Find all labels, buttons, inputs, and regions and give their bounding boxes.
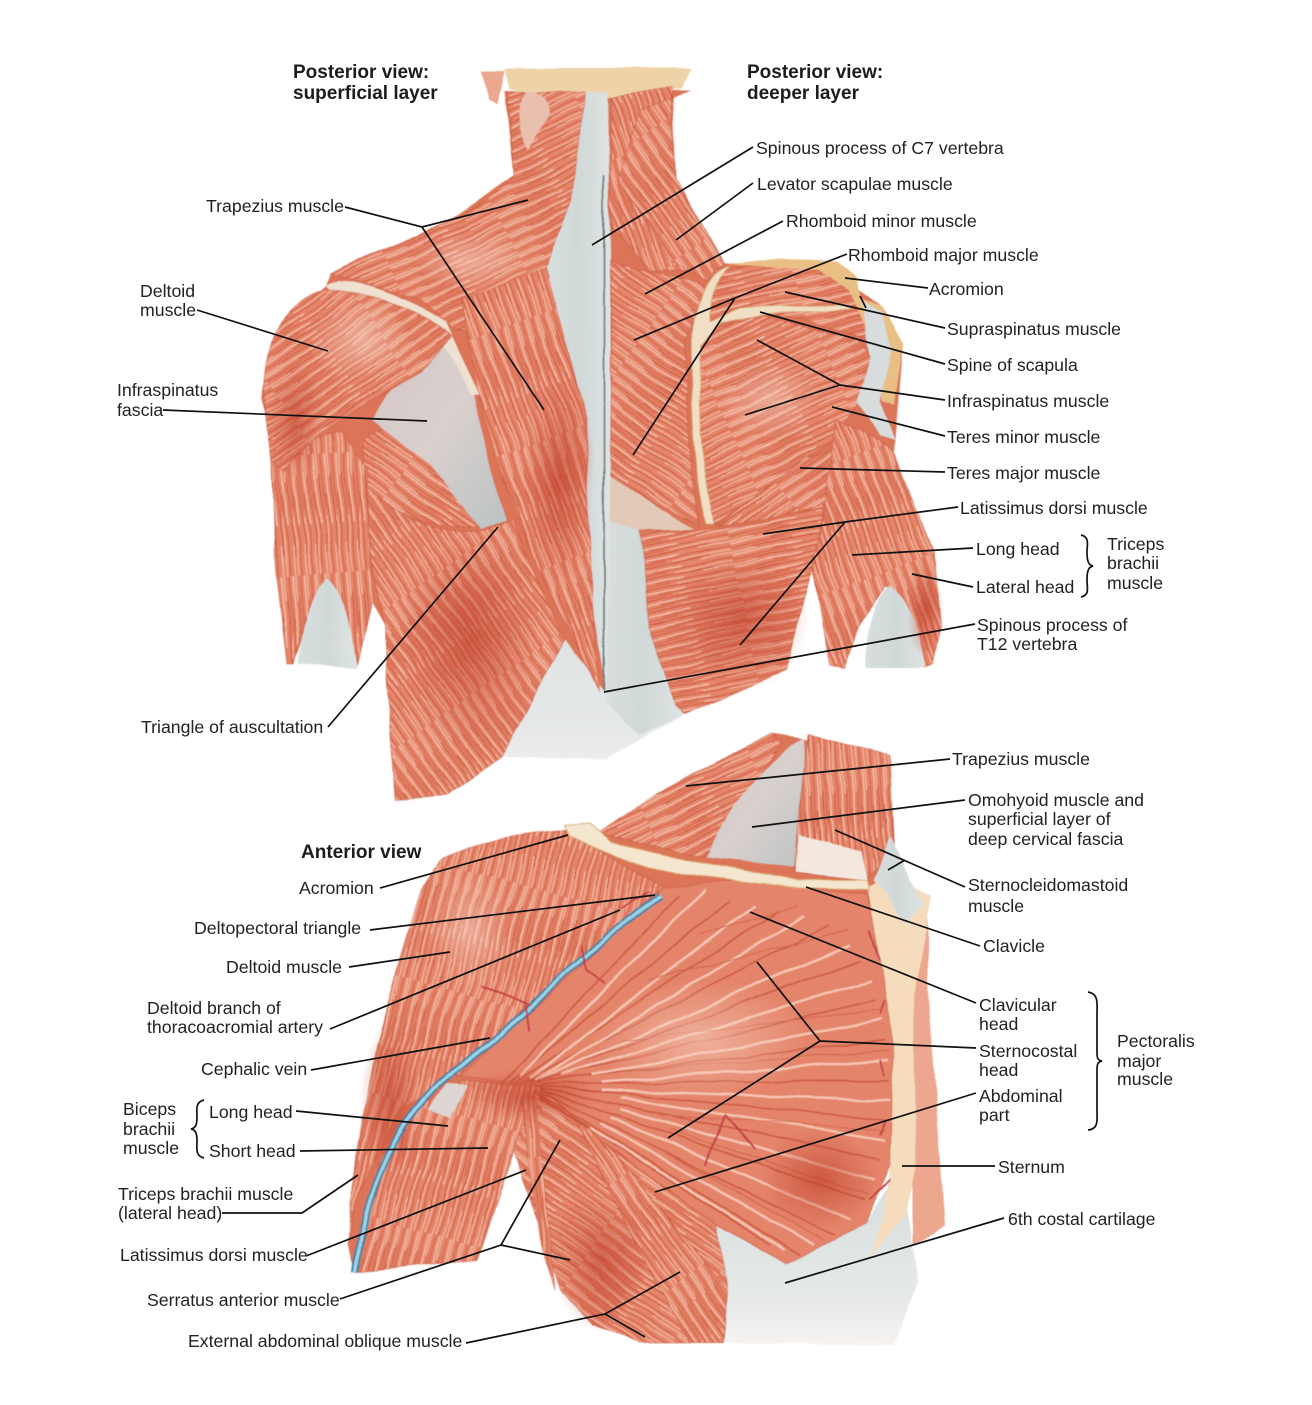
sternum band	[866, 875, 932, 1258]
label: lateral head: Lateral head	[976, 577, 1074, 597]
sternocleidomastoid tendon	[797, 835, 866, 880]
label: rhomboid major: Rhomboid major muscle	[848, 245, 1039, 265]
label: triceps brachii: Triceps	[1107, 534, 1164, 554]
oblique band	[570, 1110, 727, 1343]
label: cephalic vein: Cephalic vein	[201, 1059, 307, 1079]
label: clavicular head: Clavicular	[979, 995, 1057, 1015]
label: sternocleidomastoid: muscle	[968, 896, 1024, 916]
lower left trapezius	[462, 268, 599, 692]
biceps brachii	[356, 1082, 538, 1272]
posterior silhouette underlay	[262, 92, 941, 800]
label: supraspinatus: Supraspinatus muscle	[947, 319, 1121, 339]
label: deltoid: Deltoid	[140, 281, 195, 301]
label: infraspinatus: Infraspinatus muscle	[947, 391, 1109, 411]
sternocleidomastoid	[795, 734, 894, 880]
label: clavicular head: head	[979, 1014, 1018, 1034]
left spine of scapula	[325, 282, 480, 395]
right elbow tendon	[866, 585, 926, 668]
label: teres major: Teres major muscle	[947, 463, 1100, 483]
label: levator scapulae: Levator scapulae muscle	[757, 174, 953, 194]
label: latissimus dorsi anterior: Latissimus dorsi muscle	[120, 1245, 308, 1265]
right lumbar fascia side	[606, 522, 682, 735]
neck top band	[505, 68, 691, 98]
leader lines: posterior view	[163, 147, 975, 727]
lumbar fascia	[395, 525, 682, 802]
right levator scapulae	[620, 100, 724, 282]
shading on anterior muscles	[360, 870, 880, 1330]
label: infraspinatus fascia: fascia	[117, 400, 163, 420]
infraspinatus fascia	[372, 335, 505, 530]
abdominal fascia	[716, 1165, 917, 1345]
left elbow tendon	[298, 579, 358, 668]
label: sternocostal head: head	[979, 1060, 1018, 1080]
label: deltoid: muscle	[140, 300, 196, 320]
label: acromion anterior: Acromion	[299, 878, 374, 898]
label: trapezius: Trapezius muscle	[206, 196, 344, 216]
label: rhomboid minor: Rhomboid minor muscle	[786, 211, 977, 231]
heading: posterior superficial layer: Posterior view:	[293, 62, 429, 83]
right shoulder joint fascia	[858, 300, 895, 440]
central spine fascia	[546, 92, 612, 690]
label: sternocleidomastoid: Sternocleidomastoid	[968, 875, 1128, 895]
label: pectoralis major: major	[1117, 1051, 1161, 1071]
omohyoid and deep cervical fascia	[708, 738, 808, 868]
right teres major	[716, 450, 835, 528]
heading: posterior deeper layer: Posterior view:	[747, 62, 883, 83]
label: sternocostal head: Sternocostal	[979, 1041, 1077, 1061]
trapezius anterior	[597, 734, 780, 857]
brace: pectoralis major	[1088, 992, 1102, 1130]
label: deltoid muscle: Deltoid muscle	[226, 957, 342, 977]
right neck muscle	[610, 88, 724, 272]
cut end of neck at left	[480, 70, 505, 105]
brace: biceps brachii	[191, 1100, 204, 1158]
neck strap fascia	[872, 835, 925, 925]
labels: posterior view	[117, 138, 1164, 737]
cephalic vein	[356, 897, 662, 1272]
right-side costal fringe	[912, 905, 945, 1245]
label: biceps brachii: brachii	[123, 1119, 175, 1139]
right triceps	[813, 419, 941, 669]
label: abdominal part: part	[979, 1105, 1010, 1125]
label: acromion: Acromion	[929, 279, 1004, 299]
right infraspinatus	[696, 316, 880, 527]
axilla tendon	[428, 1084, 467, 1118]
labels: anterior view	[118, 749, 1195, 1351]
pectoralis light fibres	[520, 890, 890, 1250]
right acromion	[730, 258, 903, 404]
label: external abdominal oblique: External abdominal oblique muscle	[188, 1331, 462, 1351]
serratus and oblique muscles	[514, 1086, 727, 1343]
label: clavicle: Clavicle	[983, 936, 1045, 956]
label: triceps brachii: brachii	[1107, 553, 1159, 573]
right rhomboids	[610, 262, 712, 526]
label: trapezius anterior: Trapezius muscle	[952, 749, 1090, 769]
heading: posterior superficial layer: superficial layer	[293, 83, 438, 104]
label: long head biceps: Long head	[209, 1102, 293, 1122]
right latissimus dorsi	[640, 504, 822, 714]
label: omohyoid: Omohyoid muscle and	[968, 790, 1144, 810]
label: latissimus dorsi: Latissimus dorsi muscle	[960, 498, 1148, 518]
label: deltoid branch: thoracoacromial artery	[147, 1017, 323, 1037]
pectoralis fine fibres	[620, 905, 890, 1240]
right lower scapular gap	[610, 475, 695, 530]
clavicle	[565, 823, 868, 890]
deltoid anterior	[348, 830, 664, 1244]
label: triceps lateral head: (lateral head)	[118, 1203, 222, 1223]
pectoralis major	[459, 880, 894, 1264]
label: omohyoid: superficial layer of	[968, 809, 1111, 829]
vein highlight	[356, 897, 662, 1272]
label: deltoid branch: Deltoid branch of	[147, 998, 281, 1018]
right supraspinatus area	[695, 262, 880, 345]
illustration: anterior view of shoulder and chest	[348, 734, 945, 1345]
label: spinous process C7: Spinous process of C7 vertebra	[756, 138, 1004, 158]
label: long head: Long head	[976, 539, 1060, 559]
label: serratus anterior: Serratus anterior muscle	[147, 1290, 340, 1310]
label: 6th costal cartilage: 6th costal cartilage	[1008, 1209, 1156, 1229]
latissimus strip	[522, 1095, 555, 1290]
label: omohyoid: deep cervical fascia	[968, 829, 1123, 849]
left triceps arm	[273, 430, 372, 664]
label: triceps brachii: muscle	[1107, 573, 1163, 593]
left back rotator group	[362, 429, 500, 528]
label: deltopectoral triangle: Deltopectoral triangle	[194, 918, 361, 938]
heading: anterior view: Anterior view	[301, 842, 422, 863]
brace: triceps brachii	[1081, 535, 1093, 597]
leader lines: anterior view	[222, 759, 1004, 1343]
label: triceps lateral head: Triceps brachii muscle	[118, 1184, 293, 1204]
vertebral line	[603, 175, 605, 690]
label: sternum: Sternum	[998, 1157, 1065, 1177]
label: spinous process T12: T12 vertebra	[977, 634, 1077, 654]
pectoralis dark fibres	[500, 895, 890, 1255]
left deltoid	[265, 290, 452, 470]
label: infraspinatus fascia: Infraspinatus	[117, 380, 218, 400]
label: spine of scapula: Spine of scapula	[947, 355, 1078, 375]
label: biceps brachii: muscle	[123, 1138, 179, 1158]
scapula border	[691, 265, 850, 526]
label: abdominal part: Abdominal	[979, 1086, 1063, 1106]
label: pectoralis major: Pectoralis	[1117, 1031, 1195, 1051]
label: short head biceps: Short head	[209, 1141, 296, 1161]
label: biceps brachii: Biceps	[123, 1099, 176, 1119]
left upper trapezius	[331, 92, 586, 330]
label: pectoralis major: muscle	[1117, 1069, 1173, 1089]
label: spinous process T12: Spinous process of	[977, 615, 1127, 635]
anterior silhouette underlay	[348, 734, 905, 1343]
left latissimus dorsi	[363, 480, 564, 800]
shading on posterior muscles	[265, 230, 943, 750]
illustration: posterior view of back and shoulders	[262, 68, 943, 802]
left neck window	[520, 91, 550, 150]
label: triangle of auscultation: Triangle of auscultation	[141, 717, 323, 737]
label: teres minor: Teres minor muscle	[947, 427, 1100, 447]
heading: posterior deeper layer: deeper layer	[747, 83, 860, 104]
thoracoacromial arteries	[480, 893, 890, 1200]
